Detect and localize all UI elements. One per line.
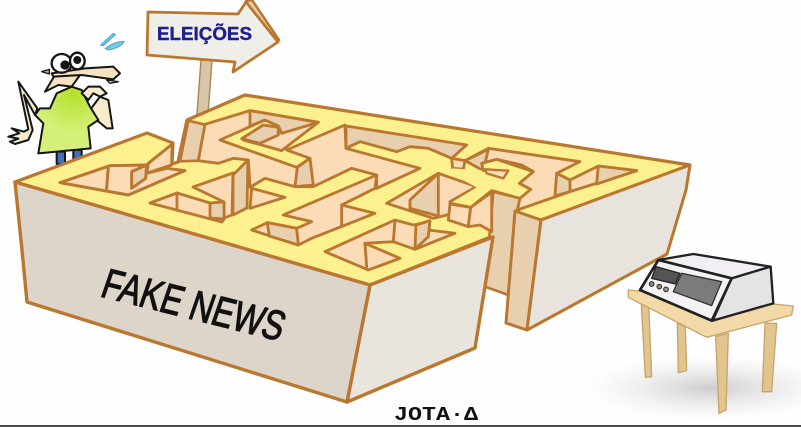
sign post xyxy=(197,60,212,114)
block: right wall of the maze xyxy=(506,165,690,330)
table shadow xyxy=(585,356,801,420)
image frame line xyxy=(0,425,801,427)
maze: pits of the left section xyxy=(60,144,185,195)
block: fake news front wall xyxy=(15,182,493,402)
signature: JOTA·Δ xyxy=(394,404,479,426)
icon: sweat drops xyxy=(101,33,124,50)
maze: outer left wall xyxy=(180,121,205,161)
maze: yellow hook and crossings xyxy=(447,159,533,207)
voting machine xyxy=(640,254,773,321)
table xyxy=(628,290,793,413)
maze: central pits xyxy=(198,111,477,270)
maze: far right wall below top xyxy=(485,192,520,295)
maze: yellow top silhouette xyxy=(15,95,690,285)
sign: arrow to elections: ELEIÇÕES xyxy=(157,23,252,44)
label: fake news: FAKE NEWS xyxy=(96,260,292,350)
maze: right-hand pits xyxy=(448,148,637,232)
character: worried man xyxy=(8,53,120,164)
sign: arrow to elections xyxy=(147,0,279,72)
maze: pits of the left middle section xyxy=(150,160,248,222)
